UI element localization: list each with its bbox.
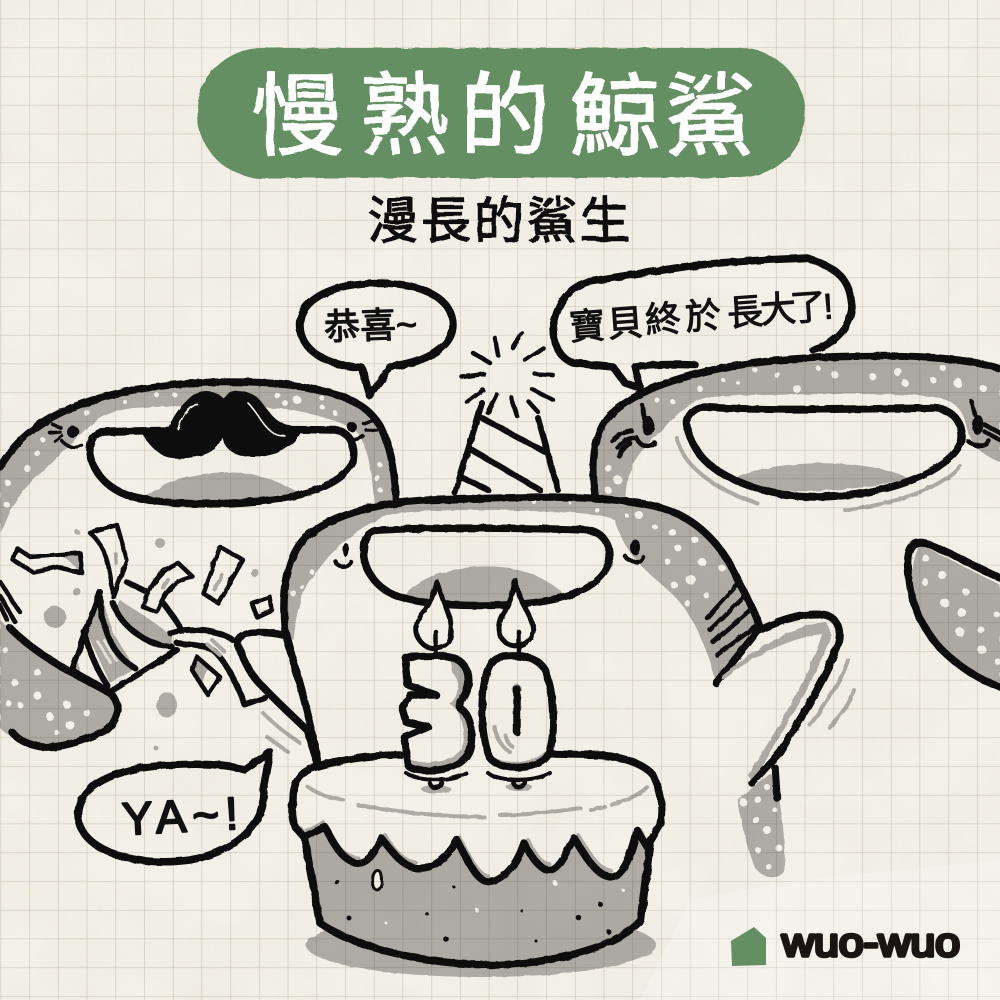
right whale spots (604, 365, 986, 494)
bubble text: YA: YA~! (121, 787, 239, 845)
birthday cake (292, 754, 662, 977)
left whale grey band (0, 382, 396, 532)
cake base (304, 830, 650, 965)
right whale outline (593, 356, 1000, 495)
cake shadow (306, 913, 656, 977)
bubble text: baby grew up: 寶貝終於長大了! (568, 285, 835, 348)
left whale outline (0, 382, 396, 505)
middle whale grey band (283, 497, 760, 683)
moustache (142, 391, 302, 458)
left whale mouth (90, 430, 354, 504)
left whale body and hand (170, 630, 300, 752)
left whale spots (4, 392, 382, 508)
confetti grey flecks (44, 530, 259, 750)
speech bubble: baby grew up (553, 258, 852, 388)
right whale left face (612, 405, 655, 457)
middle whale body (284, 497, 839, 790)
right whale grey back band (593, 356, 1000, 497)
brand logo (731, 921, 960, 966)
logo house icon (731, 927, 766, 966)
party hat (455, 403, 558, 493)
speech bubble: YA (78, 752, 270, 862)
candle number 0 (482, 656, 553, 791)
middle whale right fin (722, 614, 854, 783)
cake outline (304, 835, 650, 965)
candle number 3 (402, 656, 472, 793)
left whale faces (50, 420, 376, 447)
logo wordmark: wuo-wuo (781, 921, 960, 965)
middle whale tail fin (737, 768, 785, 877)
right whale fin (908, 542, 1000, 687)
speech bubble: congratulations (300, 283, 453, 396)
middle whale (283, 497, 854, 877)
right whale mouth (677, 407, 962, 510)
middle whale faces (335, 539, 643, 567)
icing (292, 755, 662, 882)
confetti pieces (13, 525, 272, 695)
title text: 慢熟的鯨鯊 (252, 67, 755, 167)
right whale (593, 356, 1000, 687)
illustration: whale party scene (0, 258, 1000, 977)
middle whale gill lines (707, 585, 755, 655)
cake sprinkles (334, 870, 624, 942)
left whale (0, 382, 396, 765)
left whale lower fin (0, 620, 118, 747)
icing shading (308, 787, 647, 817)
middle whale spots (290, 500, 726, 606)
left whale side fin (238, 632, 318, 765)
bubble text: congratulations: 恭喜~ (323, 304, 418, 348)
middle whale mouth (364, 528, 610, 605)
left whale whisker lines (0, 582, 20, 622)
right whale right face (968, 402, 1000, 446)
subtitle: 漫長的鯊生 (368, 193, 630, 249)
party popper (72, 582, 182, 692)
candle flames (416, 580, 533, 655)
middle whale outline (284, 497, 760, 765)
hat sparkles (462, 333, 553, 416)
title banner (197, 48, 805, 178)
